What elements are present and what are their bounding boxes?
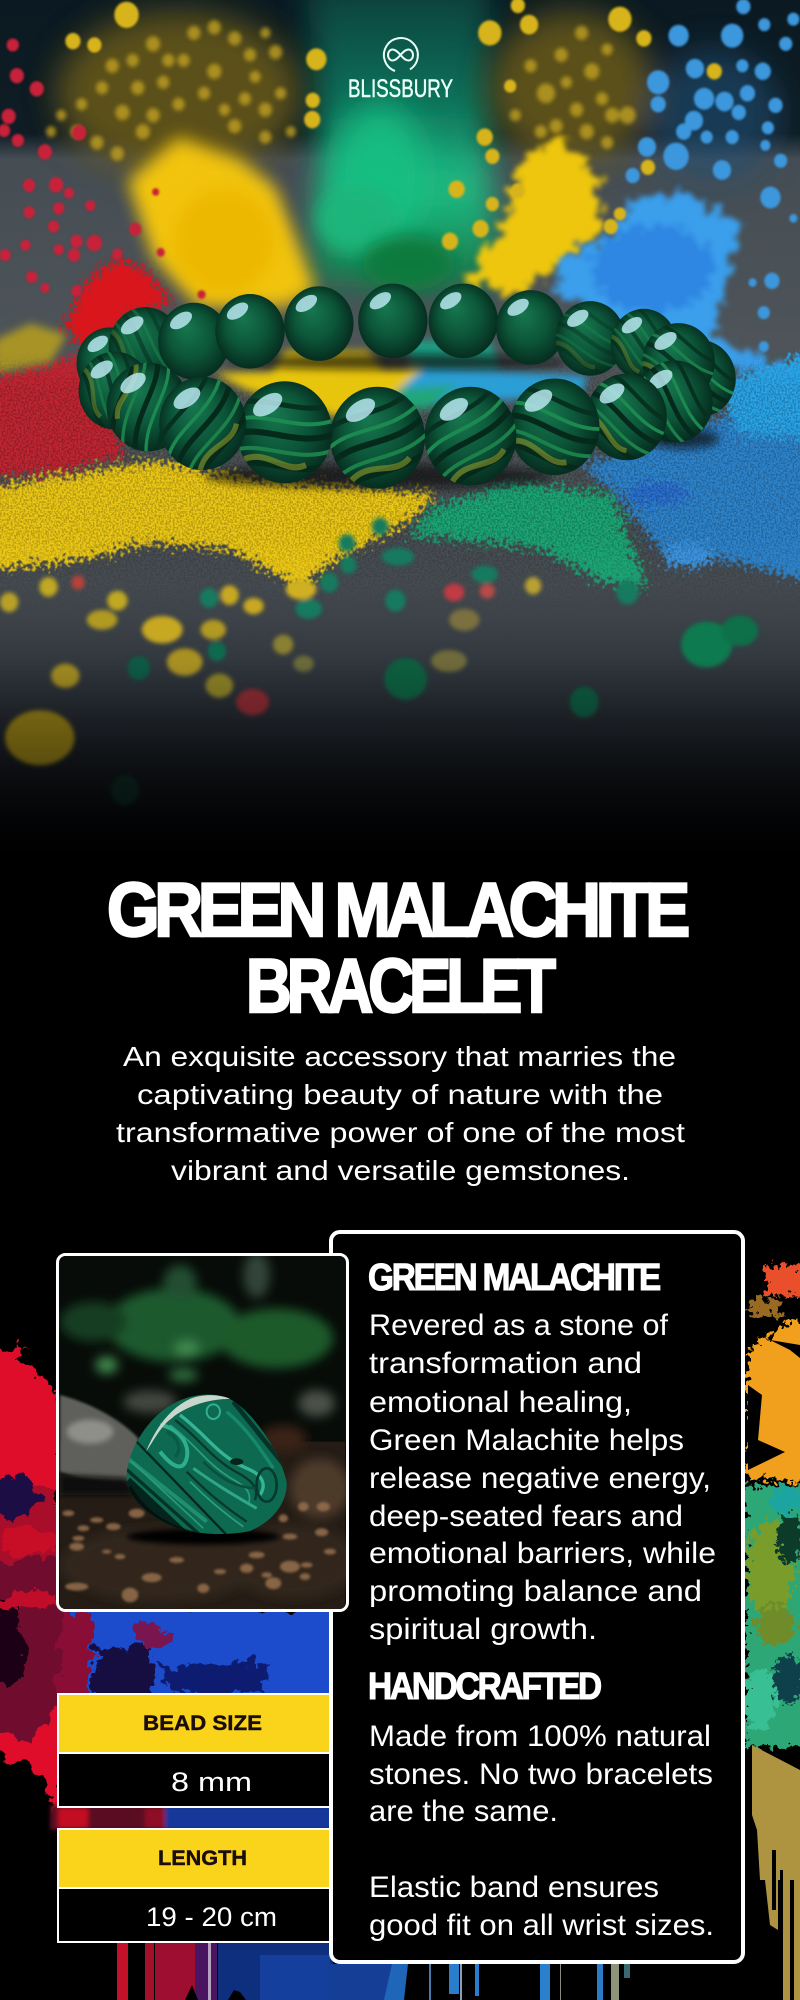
red powder cloud — [64, 258, 173, 348]
bottom fade of hero into black — [0, 660, 800, 860]
left splash blue band — [60, 1606, 350, 1700]
intro paragraph: transformative power of one of the most — [116, 1117, 685, 1148]
ground speckles — [62, 1502, 336, 1602]
bracelet: front row of beads — [75, 341, 718, 496]
right paint splash: orange, green and gold drips — [744, 1266, 800, 2000]
icon: infinity in circle — [384, 38, 418, 71]
intro paragraph: An exquisite accessory that marries the — [123, 1041, 676, 1072]
stone shadow — [127, 1529, 280, 1545]
body: green malachite description: deep-seated fears and — [369, 1500, 683, 1533]
intro paragraph — [116, 1041, 685, 1186]
bottom-left paint drips — [117, 1943, 333, 2000]
bracelet shadow — [204, 354, 719, 488]
bright yellow particles — [65, 0, 722, 250]
heading: green malachite: GREEN MALACHITE — [368, 1257, 660, 1299]
brand name: BLISSBURY — [348, 75, 453, 103]
title — [107, 868, 688, 1029]
red particles — [0, 38, 206, 299]
body: handcrafted description — [369, 1720, 714, 1942]
grey rock — [60, 1395, 138, 1485]
yellow haze at the left edge — [0, 324, 66, 373]
yellow powder clouds — [128, 137, 602, 307]
intro paragraph: captivating beauty of nature with the — [137, 1079, 663, 1110]
body: handcrafted description: Elastic band ensures — [369, 1871, 659, 1904]
body: green malachite description: Revered as a stone of — [369, 1309, 669, 1342]
spec table: bead size: 8 mm — [171, 1767, 252, 1797]
yellow powder dust haze — [56, 11, 781, 181]
spec table: bead size — [58, 1694, 330, 1807]
body: handcrafted description: stones. No two bracelets — [369, 1758, 713, 1791]
body: green malachite description: promoting balance and — [369, 1575, 702, 1608]
blue particles — [626, 0, 799, 352]
photo background foliage — [60, 1252, 360, 1610]
spec table: bead size: BEAD SIZE — [143, 1712, 262, 1735]
body: handcrafted description: good fit on all wrist sizes. — [369, 1909, 714, 1942]
yellow dust particles — [46, 20, 636, 161]
body: green malachite description: Green Malachite helps — [369, 1424, 684, 1457]
bracelet: back row of beads — [77, 284, 746, 428]
body: handcrafted description: are the same. — [369, 1795, 558, 1828]
body: green malachite description: emotional barriers, while — [369, 1537, 716, 1570]
strip between the spec boxes — [50, 1805, 335, 1830]
body: green malachite description — [369, 1309, 716, 1646]
title: GREEN MALACHITE — [107, 868, 688, 953]
hero photo: malachite bracelet on colourful powder — [0, 0, 800, 860]
spec table: length: 19 - 20 cm — [146, 1902, 277, 1932]
powder disk inside the bracelet — [214, 340, 587, 417]
ground powder rings — [0, 351, 800, 587]
malachite stone — [122, 1395, 287, 1542]
spec table: length: LENGTH — [158, 1847, 247, 1870]
body: green malachite description: spiritual growth. — [369, 1613, 597, 1646]
blue powder cloud — [556, 192, 796, 384]
photo: malachite stone on pebbled ground — [58, 1252, 360, 1610]
body: green malachite description: release negative energy, — [369, 1462, 711, 1495]
spec table: length — [58, 1829, 330, 1942]
speckle over ground powder — [0, 357, 800, 590]
bottom paint drips under the panel — [328, 1964, 630, 2000]
logo: Blissbury — [348, 38, 453, 103]
body: handcrafted description: Made from 100% natural — [369, 1720, 711, 1753]
heading: handcrafted: HANDCRAFTED — [368, 1666, 601, 1708]
body: green malachite description: transformation and — [369, 1347, 642, 1380]
text panel — [331, 1232, 743, 1962]
title: BRACELET — [246, 944, 556, 1029]
body: green malachite description: emotional healing, — [369, 1386, 632, 1419]
intro paragraph: vibrant and versatile gemstones. — [171, 1155, 630, 1186]
green powder column — [306, 0, 500, 291]
scattered ground grains — [0, 518, 758, 805]
stone highlight — [146, 1395, 230, 1452]
